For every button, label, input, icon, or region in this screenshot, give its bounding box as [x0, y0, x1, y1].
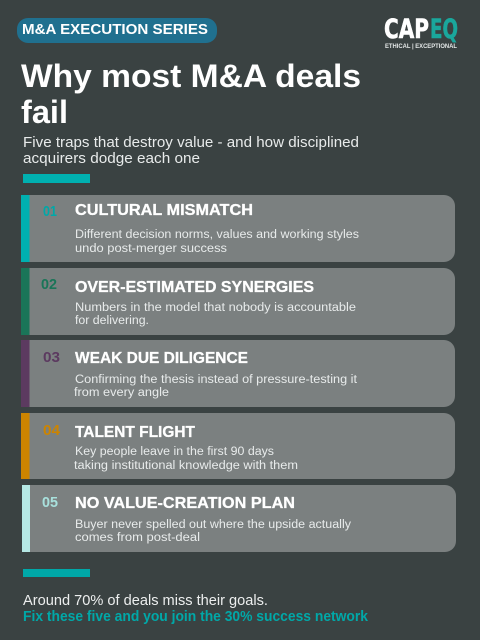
accent bar 01: [21, 195, 30, 262]
card 02: over-estimated synergies: [21, 268, 455, 335]
logo: CapEQ: ETHICAL | EXCEPTIONAL: [385, 44, 457, 50]
accent rule: header: [23, 174, 90, 183]
accent bar 04: [21, 413, 30, 479]
closing statement: Fix these five and you join the 30% success network: [23, 608, 369, 625]
number 01: 01: [43, 204, 57, 220]
number 04: 04: [43, 423, 60, 439]
description 01: undo post-merger success: [75, 243, 227, 255]
subtitle: acquirers dodge each one: [23, 150, 200, 167]
description 04: Key people leave in the first 90 days: [75, 446, 274, 458]
title: fail: [21, 94, 68, 130]
heading 01: CULTURAL MISMATCH: [75, 202, 253, 219]
description 03: [74, 374, 358, 399]
card 04: talent flight: [21, 413, 455, 479]
description 04: taking institutional knowledge with them: [74, 460, 298, 472]
card 01: cultural mismatch: [21, 195, 455, 262]
accent bar 02: [21, 268, 30, 335]
heading 04: TALENT FLIGHT: [75, 424, 196, 441]
number 05: 05: [42, 495, 58, 511]
heading 03: WEAK DUE DILIGENCE: [75, 350, 248, 367]
card 05: no value-creation plan: [22, 485, 456, 552]
heading 02: OVER-ESTIMATED SYNERGIES: [75, 279, 314, 296]
subtitle: [23, 134, 359, 167]
description 04: [74, 446, 298, 472]
card 03: weak due diligence: [21, 340, 455, 407]
description 02: for delivering.: [75, 315, 149, 327]
description 01: Different decision norms, values and working styles: [75, 229, 359, 241]
description 02: Numbers in the model that nobody is accountable: [75, 302, 356, 314]
accent bar 03: [21, 340, 30, 407]
logo: CapEQ: EQ: [430, 14, 458, 45]
closing statement: Around 70% of deals miss their goals.: [23, 592, 268, 609]
description 05: Buyer never spelled out where the upside actually: [75, 519, 351, 531]
accent rule: footer: [23, 569, 90, 577]
series badge: [17, 18, 217, 43]
title: [21, 58, 361, 130]
description 05: comes from post-deal: [75, 532, 200, 544]
subtitle: Five traps that destroy value - and how disciplined: [23, 134, 359, 151]
description 03: from every angle: [74, 387, 169, 399]
number 02: 02: [41, 277, 57, 293]
description 01: [75, 229, 359, 255]
description 05: [75, 519, 351, 544]
closing statement: [23, 592, 369, 625]
number 03: 03: [43, 350, 60, 366]
description 02: [75, 302, 356, 327]
series badge: M&A EXECUTION SERIES: [22, 22, 208, 38]
logo: CapEQ: CAP: [384, 14, 429, 45]
title: Why most M&A deals: [21, 58, 361, 94]
accent bar 05: [22, 485, 30, 552]
description 03: Confirming the thesis instead of pressure-testing it: [75, 374, 358, 386]
heading 05: NO VALUE-CREATION PLAN: [75, 495, 295, 512]
